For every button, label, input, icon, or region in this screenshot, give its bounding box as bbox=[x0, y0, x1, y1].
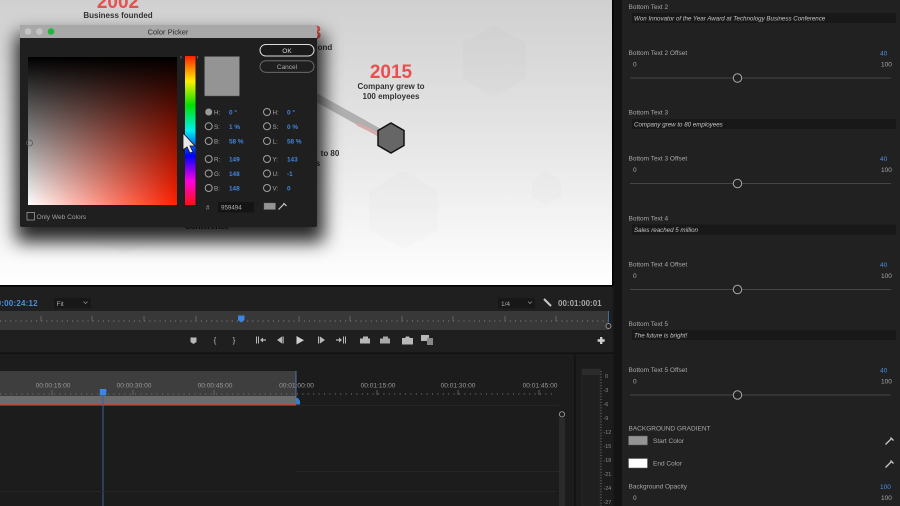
color value fields: 149 bbox=[229, 156, 240, 164]
audio meter: -3 bbox=[604, 388, 608, 394]
control group: bottom text 2: 100 bbox=[881, 62, 892, 68]
color value fields: S: bbox=[272, 124, 279, 131]
timeline connector bbox=[310, 94, 380, 134]
panel: effect controls bbox=[622, 0, 900, 506]
heading: 2015 milestone: 100 employees bbox=[363, 92, 420, 101]
heading: 2002 milestone: Business founded bbox=[83, 11, 153, 20]
control group: background opacity: Background Opacity bbox=[628, 484, 688, 490]
color value fields: 148 bbox=[229, 171, 240, 178]
control group: background opacity: 100 bbox=[880, 484, 891, 491]
button: Cancel bbox=[260, 61, 314, 72]
heading: 2015 milestone bbox=[357, 62, 425, 101]
duration timecode: 00:01:00:01 bbox=[558, 299, 602, 308]
track dividers bbox=[0, 406, 559, 492]
timeline ruler: 00:01:30:00 bbox=[441, 382, 476, 390]
audio meter: -21 bbox=[604, 472, 611, 478]
timeline ruler: 00:01:00:00 bbox=[279, 382, 314, 390]
control group: bottom text 4: Bottom Text 4 Offset bbox=[628, 262, 687, 268]
control group: bottom text 5: The future is bright! bbox=[634, 332, 688, 340]
partial 2008 milestone text bbox=[311, 23, 332, 52]
title bar: Color Picker bbox=[148, 28, 189, 36]
panel: timeline bbox=[0, 354, 611, 506]
control group: bottom text 3: Bottom Text 3 bbox=[628, 110, 669, 116]
hex input: 959494 bbox=[221, 204, 242, 212]
control group: bottom text 2 bbox=[628, 4, 896, 82]
color value fields: 0 ° bbox=[229, 108, 237, 116]
button: OK: OK bbox=[282, 48, 292, 55]
saturation brightness field bbox=[26, 57, 177, 205]
transport controls bbox=[190, 335, 605, 345]
partial 2008 milestone text: 3 bbox=[311, 23, 321, 44]
panel separator bbox=[614, 0, 622, 506]
icon: wrench bbox=[544, 299, 551, 306]
color value fields: H: bbox=[272, 110, 279, 116]
partial 2008 milestone text: ond bbox=[318, 43, 332, 52]
title bar bbox=[20, 25, 317, 38]
playhead bbox=[100, 389, 106, 506]
only web colors checkbox: Only Web Colors bbox=[36, 214, 87, 221]
color value fields: V: bbox=[272, 186, 278, 192]
control group: bottom text 3: Company grew to 80 employees bbox=[634, 121, 723, 128]
control group: bottom text 5: 40 bbox=[880, 368, 888, 374]
control group: bottom text 4 bbox=[628, 216, 896, 294]
control group: bottom text 5: 100 bbox=[881, 378, 892, 386]
control group: bottom text 2: Bottom Text 2 Offset bbox=[628, 50, 687, 57]
color swatch bbox=[204, 56, 240, 96]
end marker bbox=[295, 371, 297, 404]
audio meter: -18 bbox=[604, 458, 611, 464]
mini ruler bbox=[0, 311, 611, 330]
control group: bottom text 5: Bottom Text 5 bbox=[628, 321, 669, 328]
control group: bottom text 3: 40 bbox=[880, 156, 888, 163]
preview frame border bbox=[0, 0, 614, 286]
timeline ruler: 00:00:45:00 bbox=[198, 382, 233, 390]
color value fields: 58 % bbox=[229, 138, 244, 146]
hue slider bbox=[180, 55, 198, 205]
control group: bottom text 3: 100 bbox=[881, 167, 892, 174]
timeline ruler: 00:01:45:00 bbox=[523, 382, 558, 390]
control group: bottom text 4: 100 bbox=[881, 273, 892, 280]
dropdown: fit bbox=[54, 298, 91, 308]
timeline ruler: 00:00:30:00 bbox=[117, 382, 152, 390]
icon: eyedropper bbox=[278, 203, 286, 210]
color value fields: 0 ° bbox=[287, 108, 295, 116]
color value fields: U: bbox=[272, 171, 279, 178]
hue slider: › bbox=[180, 55, 182, 61]
color value fields bbox=[205, 108, 302, 192]
control group: background gradient: End Color bbox=[653, 460, 683, 468]
audio meter: -12 bbox=[604, 430, 611, 436]
control group: bottom text 3: 0 bbox=[633, 167, 637, 174]
audio meter: -9 bbox=[604, 416, 608, 422]
control group: bottom text 3: Bottom Text 3 Offset bbox=[628, 156, 687, 162]
heading: 2015 milestone: Company grew to bbox=[357, 82, 425, 91]
color value fields: 1 % bbox=[229, 124, 240, 131]
audio meter: -15 bbox=[604, 444, 611, 450]
color value fields: 58 % bbox=[287, 138, 302, 146]
vertical scrollbar bbox=[559, 412, 565, 506]
panel: program monitor controls bbox=[0, 287, 612, 353]
transport controls: { bbox=[214, 336, 217, 345]
dialog shadow bbox=[16, 34, 324, 242]
panel: color picker dialog bbox=[20, 25, 317, 227]
control group: bottom text 2: Bottom Text 2 bbox=[628, 4, 669, 11]
color value fields: 0 % bbox=[287, 124, 298, 131]
divider under transport bbox=[0, 352, 622, 354]
control group: bottom text 5 bbox=[628, 321, 896, 399]
color value fields: 0 bbox=[287, 186, 291, 192]
control group: background gradient bbox=[628, 426, 894, 468]
timeline ruler: 00:01:15:00 bbox=[361, 382, 396, 390]
control group: background opacity: 100 bbox=[881, 495, 892, 502]
color value fields: B: bbox=[214, 186, 220, 192]
audio meter: -27 bbox=[604, 500, 611, 506]
color value fields: R: bbox=[214, 156, 220, 164]
audio meter bbox=[574, 354, 611, 506]
audio meter: -6 bbox=[604, 402, 608, 408]
timeline ruler bbox=[0, 371, 558, 396]
icon: mouse cursor bbox=[183, 133, 195, 153]
hex input: # bbox=[206, 204, 210, 212]
control group: bottom text 3 bbox=[628, 110, 896, 188]
control group: background opacity: 0 bbox=[633, 495, 637, 502]
heading: 2015 milestone: 2015 bbox=[370, 62, 413, 83]
dropdown: resolution: 1/4 bbox=[501, 301, 510, 308]
control group: bottom text 4: 0 bbox=[633, 273, 637, 280]
color value fields: G: bbox=[214, 171, 221, 178]
control group: bottom text 2: Won Innovator of the Year Award at Technology Business Conference bbox=[634, 15, 826, 22]
control group: bottom text 5: Bottom Text 5 Offset bbox=[628, 367, 687, 374]
partial employee milestone text: s bbox=[316, 159, 321, 168]
only web colors checkbox bbox=[27, 212, 87, 221]
transport controls: } bbox=[233, 336, 236, 345]
color value fields: -1 bbox=[287, 171, 293, 178]
partial employee milestone text bbox=[316, 149, 340, 168]
control group: bottom text 2: 0 bbox=[633, 62, 637, 68]
hue slider: ‹ bbox=[196, 55, 198, 61]
button: Cancel: Cancel bbox=[277, 64, 298, 71]
background hexagons bbox=[90, 25, 561, 254]
hexagon node bbox=[378, 123, 404, 153]
control group: bottom text 4: Bottom Text 4 bbox=[628, 216, 669, 222]
control group: bottom text 4: 40 bbox=[880, 262, 888, 269]
button: OK bbox=[260, 44, 314, 56]
timeline ruler: 00:00:15:00 bbox=[36, 382, 71, 390]
dropdown: resolution bbox=[498, 298, 535, 308]
color value fields: L: bbox=[272, 138, 278, 146]
partial employee milestone text: to 80 bbox=[321, 149, 340, 158]
render bar bbox=[0, 396, 300, 406]
control group: background gradient: BACKGROUND GRADIENT bbox=[628, 426, 711, 432]
heading: 2002 milestone bbox=[83, 0, 153, 20]
audio meter: 0 bbox=[605, 374, 608, 380]
panel: video preview bbox=[0, 0, 612, 285]
control group: bottom text 2: 40 bbox=[880, 50, 888, 58]
control group: bottom text 4: Sales reached 5 million bbox=[634, 227, 699, 234]
dropdown: fit: Fit bbox=[56, 301, 64, 308]
color value fields: 143 bbox=[287, 156, 298, 164]
color value fields: H: bbox=[214, 110, 220, 116]
audio meter: -24 bbox=[604, 486, 611, 492]
color value fields: Y: bbox=[272, 156, 278, 164]
color value fields: 148 bbox=[229, 186, 240, 192]
control group: background opacity bbox=[628, 484, 892, 502]
color value fields: B: bbox=[214, 138, 220, 146]
partial conference text: Conference bbox=[185, 222, 230, 231]
small swatch bbox=[264, 203, 276, 210]
control group: background gradient: Start Color bbox=[653, 438, 685, 445]
hex input bbox=[206, 202, 254, 212]
color value fields: S: bbox=[214, 124, 220, 131]
control group: bottom text 5: 0 bbox=[633, 378, 637, 386]
